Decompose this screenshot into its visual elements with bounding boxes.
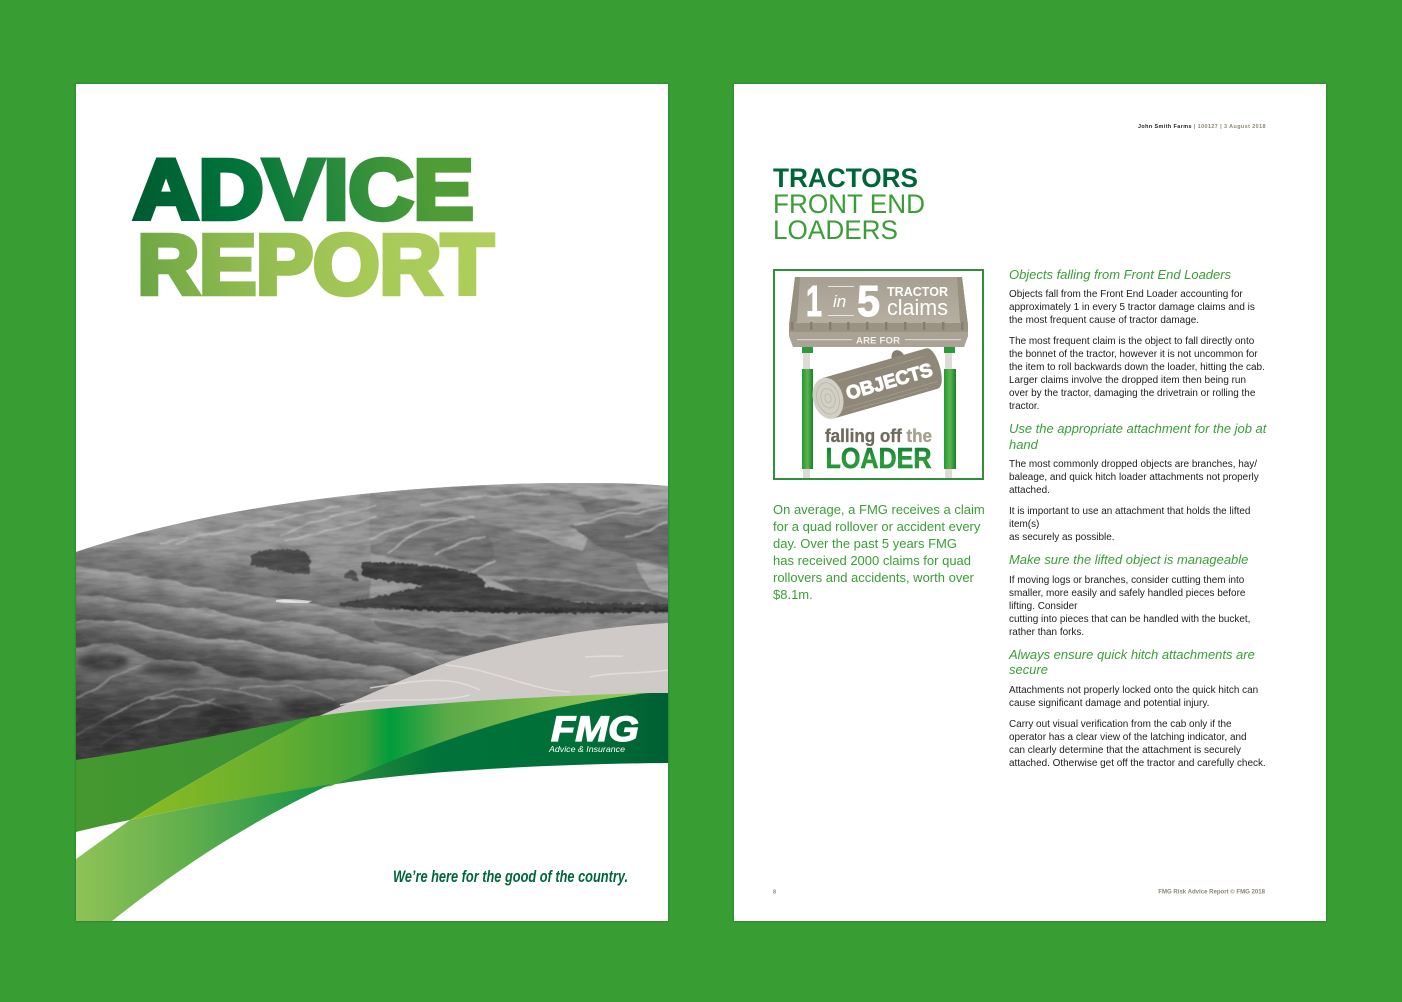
title: advice report: REPORT (138, 218, 494, 312)
infographic frame (774, 270, 983, 479)
section body: It is important to use an attachment that holds the lifted (1009, 506, 1250, 517)
loader bucket: ARE FOR (856, 336, 900, 346)
section body: Carry out visual verification from the cab only if the (1009, 719, 1232, 730)
section heading: secure (1009, 662, 1048, 677)
section heading: Objects falling from Front End Loaders (1009, 267, 1232, 282)
section body: over by the tractor, damaging the drivetrain or rolling the (1009, 388, 1256, 399)
page heading (773, 163, 925, 245)
green intro text: $8.1m. (773, 587, 813, 602)
section heading: Use the appropriate attachment for the job at (1009, 421, 1268, 436)
section body (1009, 575, 1250, 638)
section body: If moving logs or branches, consider cutting them into (1009, 575, 1245, 586)
section body (1009, 459, 1259, 543)
caption: falling off the loader: LOADER (826, 443, 932, 475)
section body: item(s) (1009, 519, 1039, 530)
infographic: 1 in 5 tractor claims (774, 270, 983, 479)
pale overlay curve on photo (305, 623, 668, 730)
section: manageable object (1009, 552, 1250, 638)
cover sheet (76, 84, 668, 921)
section body: attached. (1009, 485, 1050, 496)
swoosh: lower light ribbon (76, 784, 331, 921)
loader bucket: claims (887, 295, 948, 320)
section: quick hitch (1008, 647, 1266, 769)
section body: rather than forks. (1009, 627, 1084, 638)
loader bucket (789, 277, 968, 347)
section body: Objects fall from the Front End Loader accounting for (1009, 289, 1243, 300)
logo: FMG Advice and Insurance: Advice & Insurance (548, 744, 625, 754)
green intro text: rollovers and accidents, worth over (773, 570, 975, 585)
loader bucket: TRACTOR (887, 284, 949, 299)
page: report cover (60, 84, 685, 921)
loader bucket: 1 (806, 277, 822, 326)
page: tractors front end loaders (734, 84, 1326, 921)
section body: Attachments not properly locked onto the quick hitch can (1009, 685, 1258, 696)
loader bucket: in (833, 292, 846, 311)
section body: The most commonly dropped objects are branches, hay/ (1009, 459, 1257, 470)
section body: lifting. Consider (1009, 601, 1078, 612)
green intro text: for a quad rollover or accident every (773, 519, 981, 534)
inner page sheet (734, 84, 1326, 921)
section body: operator has a clear view of the latching indicator, and (1009, 732, 1247, 743)
section body: cause significant damage and potential injury. (1009, 698, 1209, 709)
green intro text: day. Over the past 5 years FMG (773, 536, 957, 551)
page heading: TRACTORS (773, 163, 918, 193)
page heading: FRONT END (773, 189, 925, 219)
page footer: FMG Risk Advice Report © FMG 2018 (1158, 888, 1266, 896)
section body: baleage, and quick hitch loader attachments not properly (1009, 472, 1259, 483)
page header: John Smith Farms | 100127 | 3 August 2018 (1138, 124, 1266, 130)
landscape photo of hills (76, 483, 668, 760)
section heading: Always ensure quick hitch attachments are (1008, 647, 1255, 662)
tree stands (251, 549, 672, 613)
page heading: LOADERS (773, 215, 898, 245)
section heading (1009, 421, 1268, 452)
green intro text: has received 2000 claims for quad (773, 553, 971, 568)
section: appropriate attachment (1009, 421, 1268, 543)
section body: smaller, more easily and safely handled pieces before (1009, 588, 1246, 599)
section body: the item to roll backwards down the loader, hitting the cab. (1009, 362, 1265, 373)
section body: can clearly determine that the attachment is securely (1009, 745, 1241, 756)
title: advice report: ADVICE (134, 142, 474, 236)
reservoir glint (276, 599, 312, 603)
section body (1009, 289, 1265, 412)
loader bucket: 5 (857, 277, 880, 326)
section body: approximately 1 in every 5 tractor damage claims and is (1009, 302, 1255, 313)
caption: falling off the loader: falling off the (825, 426, 932, 446)
section body: tractor. (1009, 401, 1039, 412)
posts (802, 347, 956, 478)
section heading: Make sure the lifted object is manageable (1009, 552, 1248, 567)
swoosh: dark green band (330, 693, 668, 785)
caption: falling off the loader (825, 426, 932, 475)
section: objects falling (1009, 267, 1265, 412)
section body: attached. Otherwise get off the tractor and carefully check. (1009, 758, 1266, 769)
title: advice report (134, 142, 494, 312)
section body: the most frequent cause of tractor damage. (1009, 315, 1199, 326)
foreground shadow patches (76, 653, 338, 753)
section body (1009, 685, 1266, 769)
section heading (1008, 647, 1255, 677)
section body: the bonnet of the tractor, however it is not uncommon for (1009, 349, 1258, 360)
log with objects label (806, 340, 946, 423)
green intro text: On average, a FMG receives a claim (773, 502, 985, 517)
section body: as securely as possible. (1009, 532, 1114, 543)
swoosh: mid green band (76, 717, 311, 832)
tagline: We’re here for the good of the country. (393, 868, 628, 886)
logo: FMG Advice and Insurance: FMG (551, 710, 639, 749)
log with objects label: OBJECTS (844, 360, 935, 405)
section body: Larger claims involve the dropped item then being run (1009, 375, 1246, 386)
page number: 8 (773, 890, 776, 896)
section body: cutting into pieces that can be handled with the bucket, (1009, 614, 1250, 625)
swoosh: bright ribbon (130, 693, 650, 820)
green intro text (773, 502, 985, 602)
section body: The most frequent claim is the object to fall directly onto (1009, 336, 1255, 347)
section heading: hand (1009, 437, 1039, 452)
